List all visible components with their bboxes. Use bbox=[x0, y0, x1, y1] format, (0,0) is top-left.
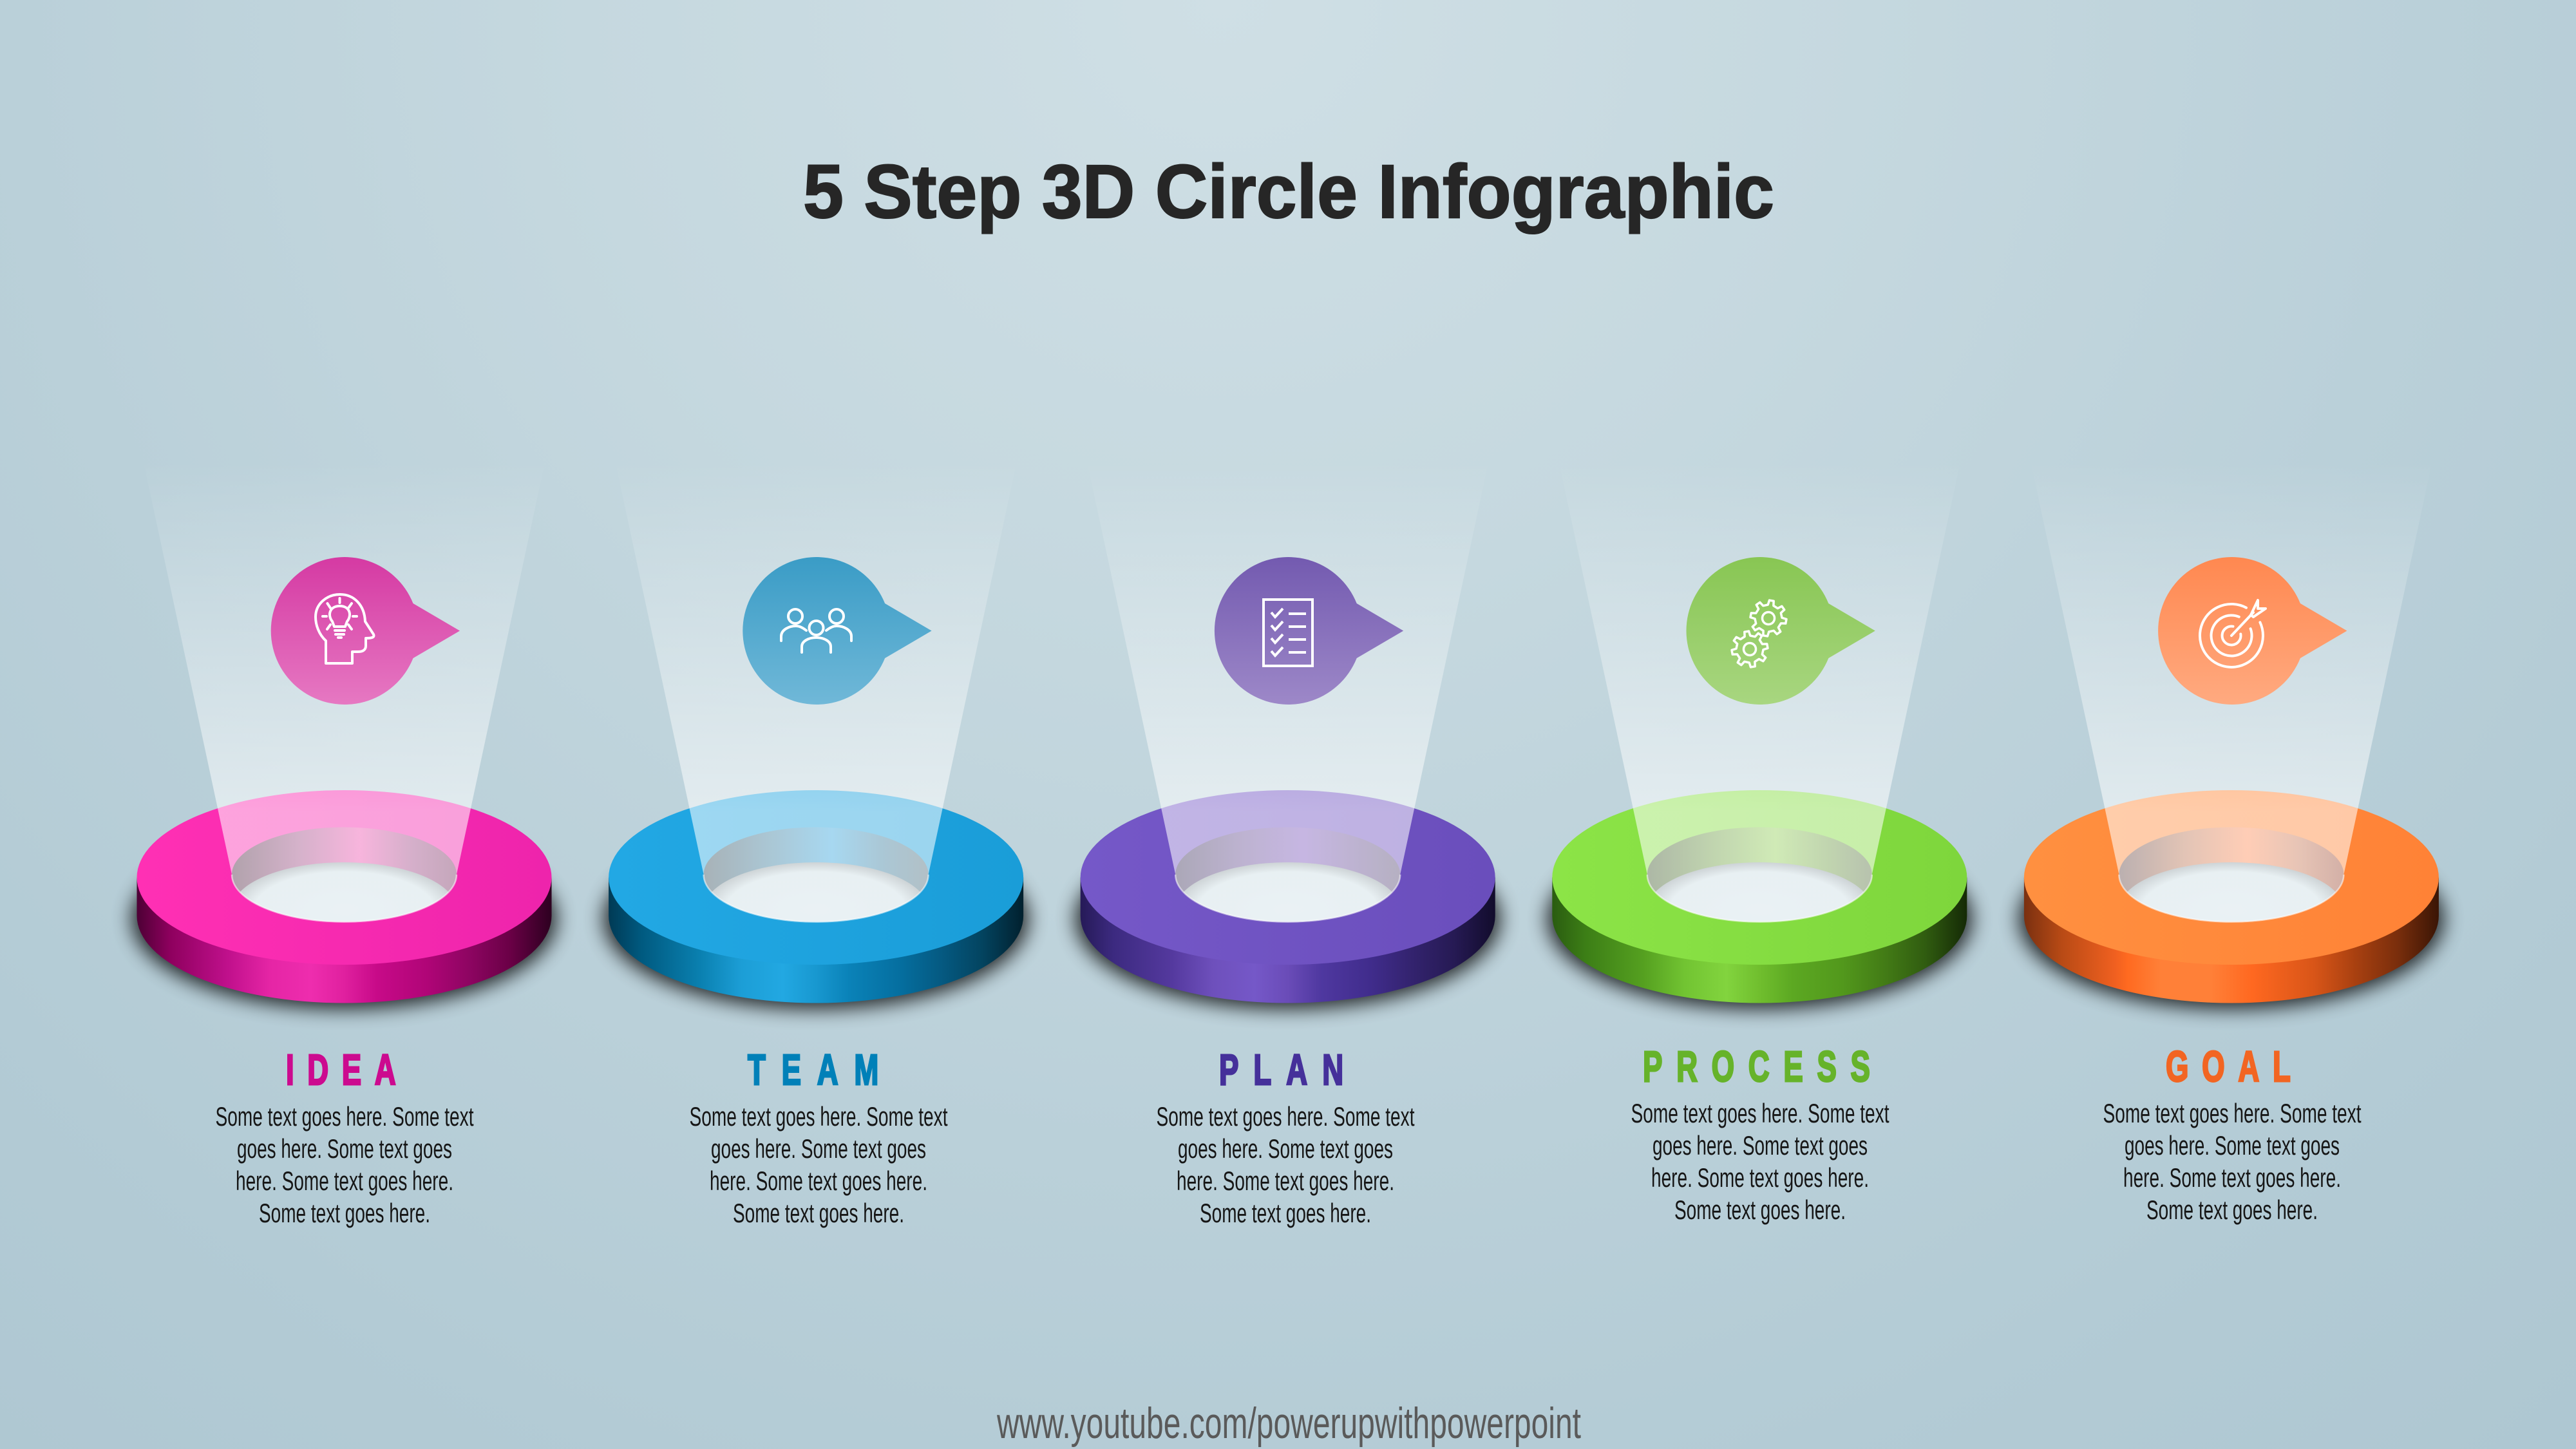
text block: process: Some text goes here. bbox=[1674, 1195, 1846, 1225]
icon: target with arrow bbox=[2200, 600, 2266, 667]
text block: plan: goes here. Some text goes bbox=[1178, 1133, 1393, 1164]
heading: plan: PLAN bbox=[1219, 1046, 1343, 1094]
heading: idea: IDEA bbox=[286, 1046, 396, 1094]
text block: team: here. Some text goes here. bbox=[710, 1166, 927, 1196]
text block: plan: Some text goes here. bbox=[1200, 1198, 1371, 1228]
text block: idea: here. Some text goes here. bbox=[236, 1166, 453, 1196]
text block: idea: Some text goes here. Some text bbox=[215, 1101, 474, 1132]
heading: team: TEAM bbox=[748, 1046, 878, 1094]
text block: plan: here. Some text goes here. bbox=[1177, 1166, 1394, 1196]
panel: step 1 idea bbox=[131, 425, 556, 1228]
icon: two gears bbox=[1729, 598, 1789, 670]
text block: team: goes here. Some text goes bbox=[711, 1133, 926, 1164]
text block: idea: goes here. Some text goes bbox=[237, 1133, 452, 1164]
text block: idea bbox=[215, 1101, 474, 1228]
icon: three people bbox=[781, 609, 851, 652]
icon bubble: idea bbox=[271, 557, 460, 705]
heading: process: PROCESS bbox=[1643, 1043, 1870, 1091]
text block: goal: Some text goes here. Some text bbox=[2103, 1098, 2362, 1128]
text block: process: goes here. Some text goes bbox=[1653, 1130, 1868, 1160]
text block: goal bbox=[2103, 1098, 2362, 1225]
text block: goal: goes here. Some text goes bbox=[2125, 1130, 2340, 1160]
icon bubble: plan bbox=[1215, 557, 1403, 705]
panel: step 3 plan bbox=[1075, 425, 1501, 1228]
title: 5 Step 3D Circle Infographic bbox=[803, 149, 1774, 234]
light beam: idea bbox=[136, 425, 553, 922]
3D ring: process bbox=[1547, 790, 1972, 1009]
text block: process: Some text goes here. Some text bbox=[1631, 1098, 1889, 1128]
footer url: www.youtube.com/powerupwithpowerpoint bbox=[996, 1399, 1581, 1448]
text block: goal: here. Some text goes here. bbox=[2123, 1162, 2341, 1193]
icon: checklist bbox=[1264, 600, 1312, 666]
text block: team: Some text goes here. bbox=[733, 1198, 904, 1228]
text block: team: Some text goes here. Some text bbox=[689, 1101, 948, 1132]
3D ring: idea bbox=[131, 790, 556, 1009]
3D ring: goal bbox=[2019, 790, 2444, 1009]
text block: process bbox=[1631, 1098, 1889, 1225]
text block: plan bbox=[1157, 1101, 1415, 1228]
heading: goal: GOAL bbox=[2166, 1043, 2291, 1091]
light beam: process bbox=[1551, 425, 1968, 922]
light beam: team bbox=[607, 425, 1025, 922]
panel: step 5 goal bbox=[2019, 425, 2444, 1225]
text block: team bbox=[689, 1101, 948, 1228]
text block: plan: Some text goes here. Some text bbox=[1157, 1101, 1415, 1132]
text block: goal: Some text goes here. bbox=[2146, 1195, 2318, 1225]
3D ring: team bbox=[603, 790, 1028, 1009]
panel: step 4 process bbox=[1547, 425, 1972, 1225]
light beam: plan bbox=[1079, 425, 1497, 922]
text block: idea: Some text goes here. bbox=[259, 1198, 430, 1228]
text block: process: here. Some text goes here. bbox=[1651, 1162, 1869, 1193]
light beam: goal bbox=[2023, 425, 2440, 922]
icon: head with lightbulb bbox=[316, 594, 374, 663]
panel: step 2 team bbox=[603, 425, 1028, 1228]
icon bubble: team bbox=[743, 557, 932, 705]
icon bubble: goal bbox=[2158, 557, 2347, 705]
3D ring: plan bbox=[1075, 790, 1501, 1009]
icon bubble: process bbox=[1686, 557, 1875, 705]
